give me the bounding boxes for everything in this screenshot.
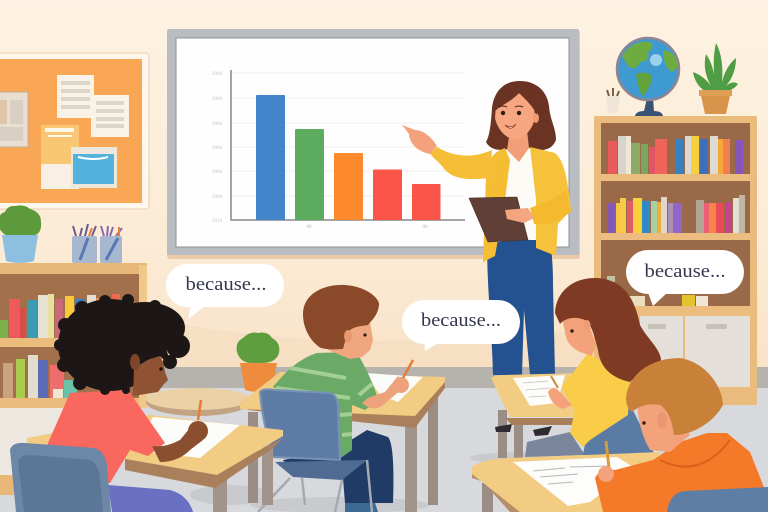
face (637, 395, 690, 452)
desk top (240, 372, 445, 416)
jacket (483, 148, 510, 262)
chair legs (258, 460, 372, 512)
bubble: because (left): because... (186, 274, 266, 295)
x-axis labels: 00 (422, 225, 428, 230)
shirt (48, 390, 165, 483)
cabinet base (0, 475, 14, 495)
pencil (198, 400, 201, 420)
pencil (403, 360, 413, 378)
hand (598, 466, 614, 482)
shoes (345, 503, 378, 512)
shirt (273, 352, 378, 460)
chair (10, 443, 111, 512)
pinned newspaper (0, 92, 28, 147)
ear (584, 320, 590, 330)
eyes and smile (499, 106, 523, 128)
floor (0, 388, 768, 512)
worksheet (365, 373, 423, 402)
pencil (606, 441, 609, 468)
icon: potted succulent (693, 43, 738, 114)
books bottom row (607, 276, 708, 306)
panel: whiteboard with bar chart (167, 29, 580, 259)
blue pocket note (71, 147, 117, 188)
chair (583, 398, 655, 455)
x-axis labels (306, 225, 428, 230)
hood fold (660, 440, 730, 467)
student girl with curly hair (10, 294, 208, 512)
desk legs (428, 395, 438, 505)
desk: front right (472, 452, 660, 512)
student girl with yellow shirt (525, 278, 661, 457)
shelf boards (0, 263, 147, 408)
icon: pencil cups (72, 224, 122, 263)
cabinet (0, 408, 100, 478)
pants (108, 485, 193, 512)
pointing arm (430, 147, 492, 179)
y-axis labels (212, 72, 222, 224)
shelf boards (600, 174, 751, 315)
back table (146, 388, 250, 416)
desk top (491, 373, 580, 417)
bubble: because (right): because... (644, 261, 726, 282)
bar: orange (334, 153, 363, 220)
wall (0, 0, 768, 370)
desk apron (505, 418, 580, 425)
eye (363, 333, 367, 337)
chair seat (275, 460, 367, 480)
shirt stripes (276, 368, 372, 435)
bubble: because (right) (626, 250, 744, 306)
desk top (472, 452, 660, 512)
teacher (402, 81, 571, 375)
desk top (27, 415, 283, 475)
icon: middle plant (237, 333, 279, 392)
books row one (0, 294, 120, 338)
teacher shoes (495, 424, 512, 432)
hair (303, 285, 379, 349)
icon: globe (617, 38, 679, 116)
chair back (260, 389, 340, 460)
left shelf decor (0, 205, 122, 263)
floor desk far right (491, 373, 580, 458)
arm (152, 428, 203, 462)
ear (130, 354, 140, 370)
pencil (551, 376, 558, 388)
trousers (487, 237, 555, 375)
worksheet (132, 417, 240, 458)
face (495, 93, 535, 139)
floor shadows (190, 452, 570, 512)
pinned note two (91, 95, 129, 137)
shirt (562, 353, 630, 447)
pants (525, 432, 585, 457)
panel: left bookshelf (0, 263, 147, 495)
face (328, 322, 373, 359)
shirt (497, 148, 537, 240)
student boy in orange hoodie (595, 358, 768, 512)
hand (188, 421, 208, 441)
bookcase back (601, 123, 750, 315)
cork surface (0, 59, 142, 203)
bubble: because (middle) (402, 300, 520, 351)
y-axis labels: 2000 (212, 195, 222, 200)
y-axis labels: 2000 (212, 170, 222, 175)
pants (283, 430, 393, 503)
desk side (472, 470, 577, 512)
hair (486, 81, 556, 150)
baseboard (0, 367, 768, 389)
icon: small pencil cup (606, 88, 620, 114)
handwriting lines (523, 381, 550, 397)
ear (533, 113, 539, 123)
hand (393, 377, 409, 393)
chair (667, 487, 768, 512)
board surface (176, 38, 569, 247)
bubble: because (left) (166, 264, 284, 319)
hoodie (595, 433, 768, 512)
y-axis labels: 2000 (212, 97, 222, 102)
fringe (494, 89, 537, 115)
icon: potted plant (0, 205, 41, 263)
bookcase frame (594, 116, 757, 405)
y-axis labels: 2010 (212, 219, 222, 224)
arm (548, 388, 572, 409)
hair lock (130, 345, 172, 368)
student boy with green shirt (258, 285, 413, 512)
forearm sleeve (530, 190, 571, 224)
chair inner panel (18, 455, 103, 512)
wall shadow band (120, 312, 600, 368)
curly hair (54, 294, 190, 395)
desk: boy (240, 372, 445, 512)
clipboard (469, 197, 528, 242)
shelf back (0, 273, 140, 408)
desk: girl (27, 415, 283, 512)
handwriting lines (533, 466, 610, 484)
board frame (167, 29, 579, 255)
y-axis labels: 2000 (212, 122, 222, 127)
holding hand (505, 208, 534, 223)
cabinet doors (640, 316, 750, 387)
hair (626, 358, 723, 435)
eye (570, 329, 574, 333)
chart axes (231, 70, 465, 220)
desk apron (240, 378, 445, 428)
eye (159, 367, 163, 371)
panel: right bookcase (594, 116, 757, 405)
books top row (608, 136, 743, 174)
pointing hand (402, 125, 437, 154)
neck and face (562, 318, 596, 356)
arm (362, 376, 405, 408)
panel: bulletin board (0, 53, 149, 209)
face (133, 354, 168, 396)
chart gridlines (231, 73, 464, 196)
ear (344, 330, 352, 342)
desk legs (498, 410, 507, 458)
pinned note one (57, 75, 94, 118)
x-axis labels: 00 (306, 225, 312, 230)
desk legs (262, 445, 273, 505)
bar: blue (256, 95, 285, 220)
y-axis labels: 2000 (212, 146, 222, 151)
books row two (3, 355, 77, 398)
bubble: because (middle): because... (421, 310, 501, 331)
bar: red short (412, 184, 440, 220)
ear (657, 412, 667, 428)
board frame (0, 53, 149, 209)
eye (642, 421, 646, 425)
worksheet (513, 457, 635, 506)
worksheet (513, 375, 565, 406)
hair (555, 278, 661, 382)
y-axis labels: 2000 (212, 72, 222, 77)
yellow folder note (41, 125, 79, 189)
board shadow (167, 30, 580, 259)
neck (507, 130, 529, 162)
bar: green (295, 129, 324, 220)
desk legs (482, 483, 493, 512)
desk apron (125, 438, 283, 488)
bar: red (373, 170, 402, 220)
books middle row (608, 195, 745, 233)
